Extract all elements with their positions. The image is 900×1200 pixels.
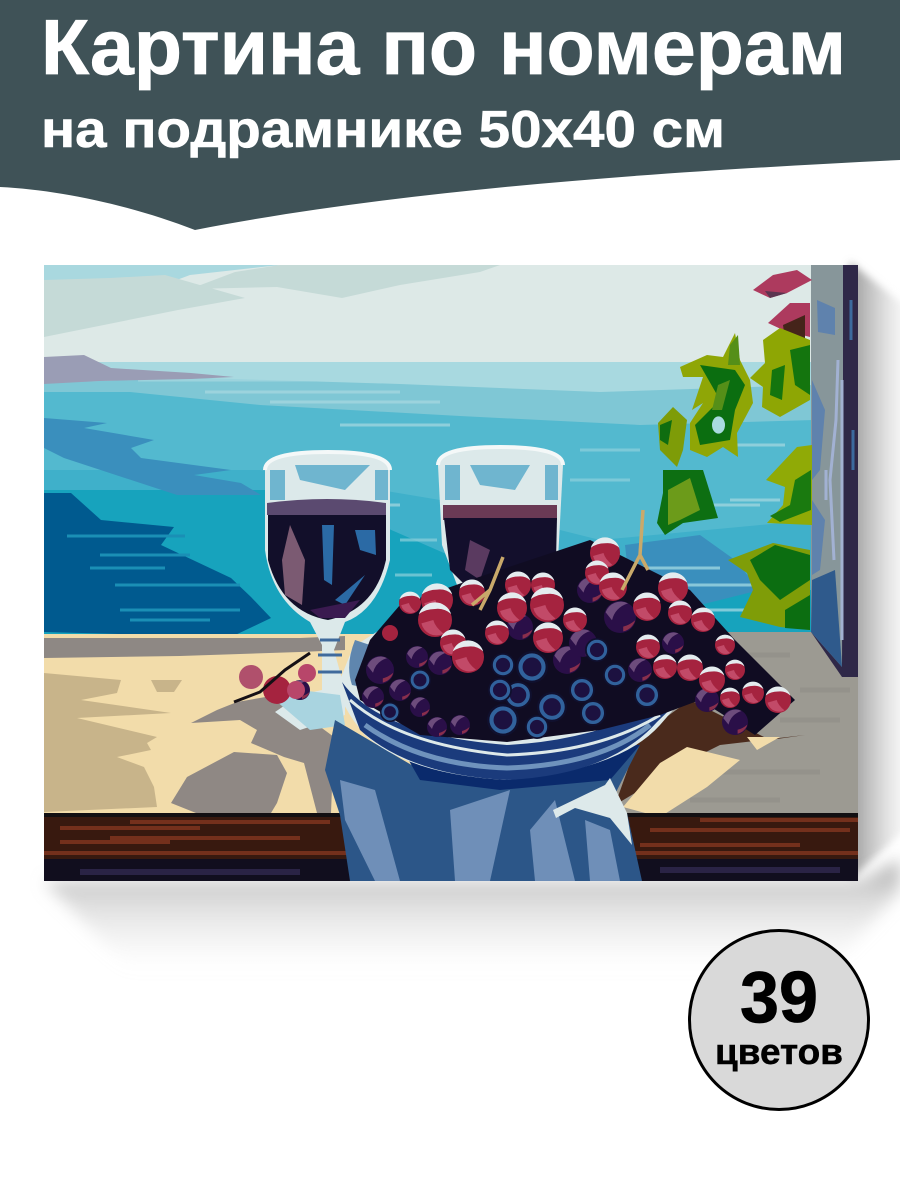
subtitle: на подрамнике 50х40 см bbox=[41, 101, 725, 159]
title: Картина по номерам bbox=[41, 3, 846, 91]
cloth shadows bbox=[400, 745, 640, 790]
left wine glass bbox=[265, 452, 390, 730]
vine leaves and flowers bbox=[657, 270, 812, 630]
badge label: цветов bbox=[715, 1031, 843, 1072]
plate bbox=[342, 631, 673, 780]
canvas drop shadow bbox=[44, 262, 900, 970]
blue cloth bbox=[325, 720, 642, 881]
white cloth fold bbox=[553, 778, 632, 845]
distant headland bbox=[44, 355, 234, 384]
sill front edge bbox=[44, 813, 858, 881]
sea bbox=[44, 362, 814, 642]
painting: wine and grapes by the sea bbox=[44, 265, 858, 881]
grape stems bbox=[472, 510, 648, 610]
badge number: 39 bbox=[740, 958, 818, 1038]
badge: colour count bbox=[690, 930, 868, 1110]
cloth highlights bbox=[340, 780, 620, 881]
small grape cluster on sill bbox=[234, 653, 316, 704]
bunch of grapes bbox=[355, 537, 795, 742]
header banner bbox=[0, 0, 900, 230]
right wine glass bbox=[438, 447, 563, 600]
sandy sill bbox=[44, 632, 858, 817]
sky bbox=[44, 265, 858, 365]
wooden window post bbox=[811, 265, 858, 677]
